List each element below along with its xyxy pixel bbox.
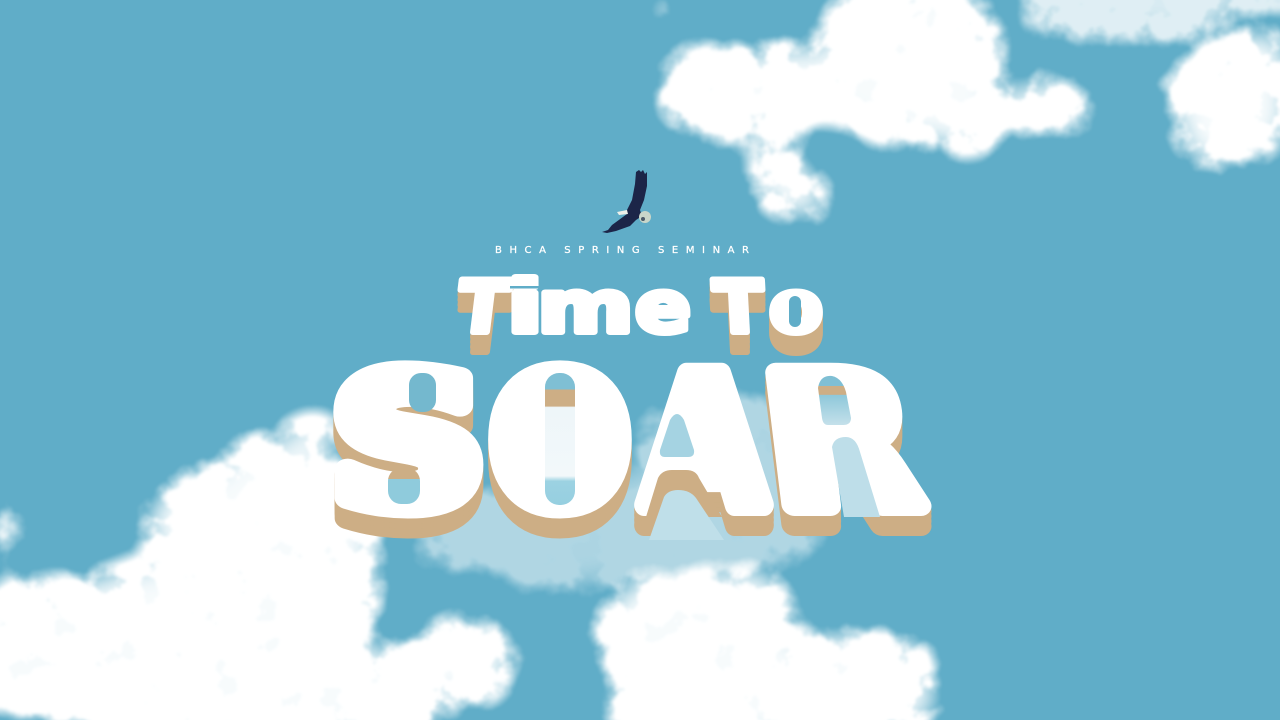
- heading: Time To: o: [769, 265, 823, 349]
- heading: SOAR: S: [331, 339, 486, 548]
- S upper notch: [409, 373, 436, 412]
- cloud: faded behind title: [415, 395, 961, 595]
- heading: Time To: T: [453, 266, 513, 350]
- O counter: [527, 373, 591, 505]
- subtitle: BHCA SPRING SEMINAR: [495, 245, 749, 256]
- cloud: bottom left: [0, 408, 512, 720]
- cloud: top centre: [646, 0, 1098, 236]
- i dot gap: [510, 286, 540, 288]
- R counter: [818, 376, 851, 425]
- heading: SOAR: A: [643, 339, 765, 548]
- icon: soaring eagle: [602, 170, 651, 233]
- cloud: far right: [1163, 32, 1280, 170]
- heading: Time To: i: [507, 265, 543, 349]
- heading: Time To: m: [538, 265, 634, 349]
- cloud: bottom centre: [590, 563, 1067, 720]
- heading: Time To: e: [635, 265, 691, 349]
- cloud: top right strip: [1020, 0, 1280, 43]
- heading: SOAR: [331, 338, 929, 548]
- A counter: [660, 414, 711, 457]
- S lower notch: [388, 468, 420, 504]
- R leg gap: [832, 437, 880, 517]
- A leg gap: [646, 470, 724, 540]
- o counter: [789, 296, 801, 327]
- heading: Time To: T: [711, 265, 766, 349]
- heading: SOAR: O: [490, 339, 630, 548]
- heading: Time To: [453, 265, 823, 350]
- heading: SOAR: R: [755, 338, 929, 548]
